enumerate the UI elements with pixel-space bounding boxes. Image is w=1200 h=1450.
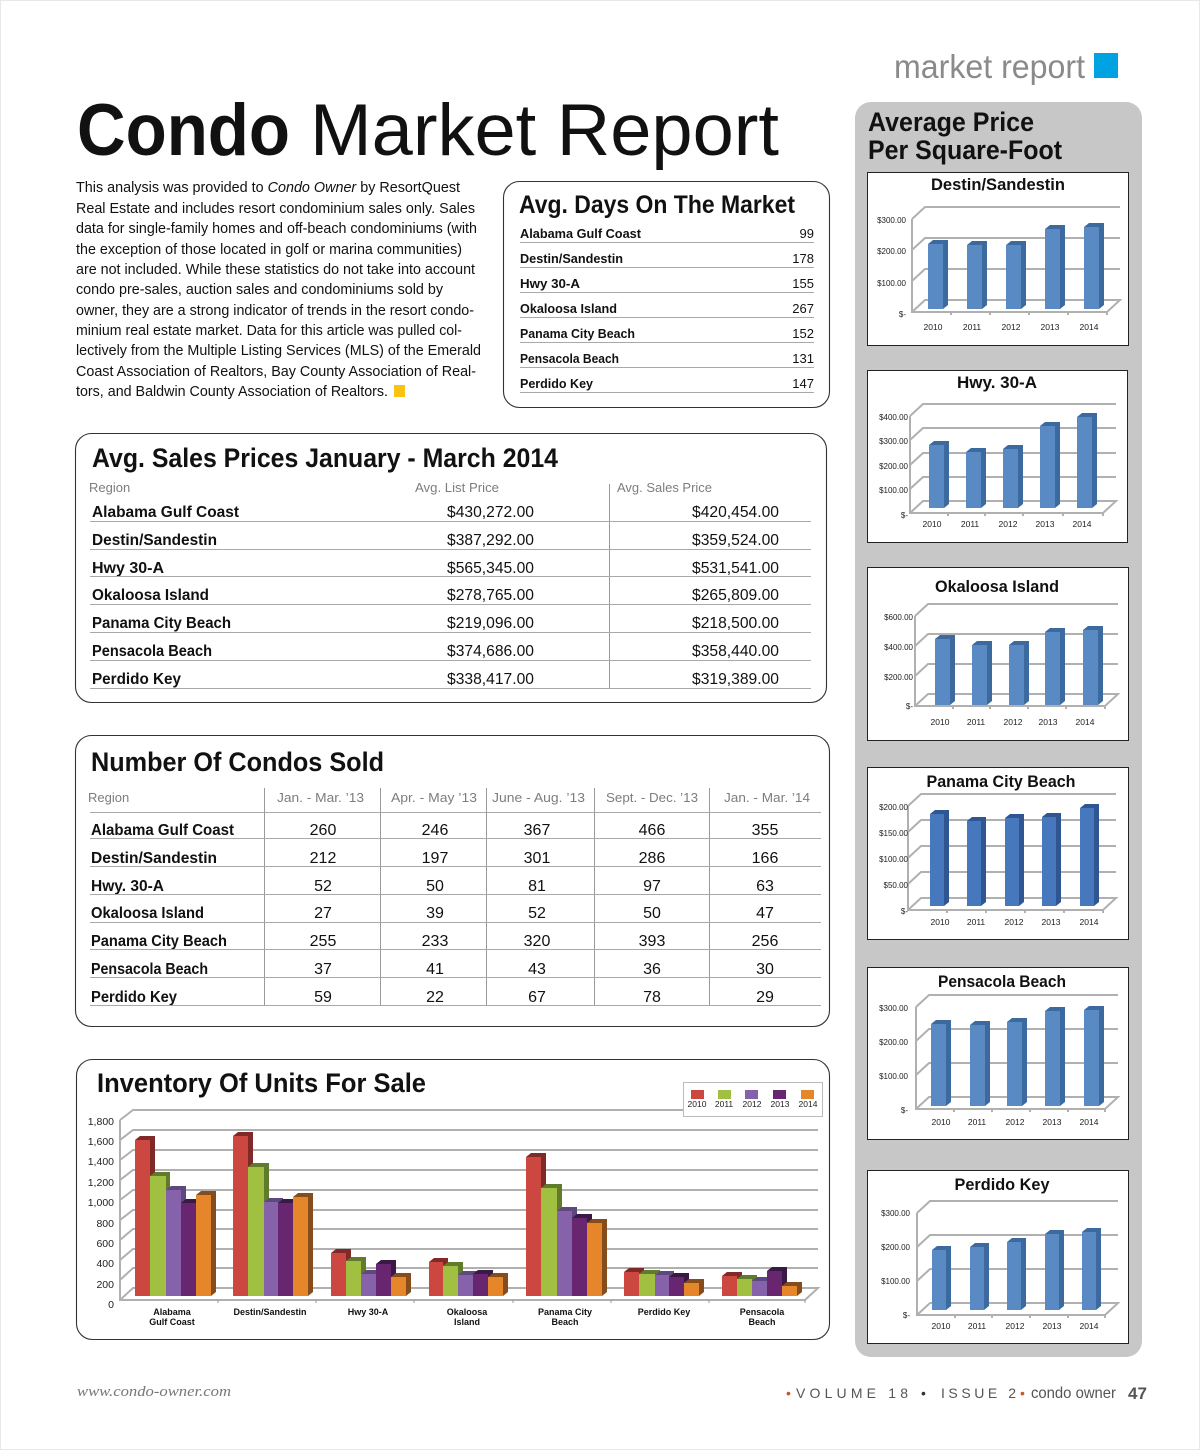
chart: Pensacola Beach: Pensacola Beach — [938, 973, 1066, 991]
chart: Okaloosa Island: 2014 — [1076, 717, 1095, 727]
chart: Pensacola Beach: 2013 — [1043, 1117, 1062, 1127]
bars: Okaloosa Island — [429, 1258, 508, 1296]
footer: volume, issue and page number: • — [786, 1385, 791, 1401]
row: Hwy. 30-A: 97 — [643, 878, 661, 895]
heading: average price per square-foot — [868, 107, 1062, 165]
chart grid and y axis — [88, 1110, 818, 1311]
row: Panama City Beach: 255 — [310, 933, 336, 950]
chart: Pensacola Beach: 2012 — [1006, 1117, 1025, 1127]
row: Pensacola Beach — [90, 643, 811, 660]
row: Hwy 30-A: $531,541.00 — [692, 560, 779, 577]
row: Perdido Key: Perdido Key — [92, 671, 181, 688]
row: Panama City Beach: $218,500.00 — [692, 615, 779, 632]
chart: Destin/Sandestin: 2013 — [1041, 322, 1060, 332]
row: Hwy. 30-A — [90, 878, 821, 895]
chart: Destin/Sandestin — [868, 172, 1128, 346]
chart: Panama City Beach: $200.00 — [879, 803, 909, 812]
chart: Destin/Sandestin: Destin/Sandestin — [931, 176, 1065, 194]
chart: Panama City Beach: 2014 — [1080, 917, 1099, 927]
chart: Panama City Beach: $- — [901, 907, 908, 916]
chart: Okaloosa Island: 2010 — [931, 717, 950, 727]
row: Panama City Beach: $219,096.00 — [447, 615, 534, 632]
row: Hwy 30-A: Hwy 30-A — [92, 560, 164, 577]
row: Destin/Sandestin: 212 — [310, 850, 336, 867]
row: Pensacola Beach: 41 — [426, 961, 444, 978]
row: Panama City Beach: Panama City Beach — [92, 615, 231, 632]
row: Destin/Sandestin: Destin/Sandestin — [520, 251, 623, 266]
category labels: Hwy 30-A — [348, 1307, 389, 1317]
row: Okaloosa Island: Okaloosa Island — [92, 587, 209, 604]
chart grid and y axis: 1,200 — [88, 1177, 114, 1189]
chart: Panama City Beach: $150.00 — [879, 829, 909, 838]
row: Perdido Key: Perdido Key — [520, 376, 594, 391]
row: Hwy 30-A: 155 — [792, 276, 814, 291]
category labels — [149, 1307, 785, 1327]
row: Hwy. 30-A: 50 — [426, 878, 444, 895]
row: Pensacola Beach: 131 — [792, 351, 814, 366]
category labels: Beach — [551, 1317, 579, 1327]
row: Perdido Key: 67 — [528, 989, 546, 1006]
row: Perdido Key: 78 — [643, 989, 661, 1006]
chart: Destin/Sandestin: 2010 — [924, 322, 943, 332]
bars: Alabama Gulf Coast — [135, 1136, 216, 1296]
chart: Destin/Sandestin: 2014 — [1080, 322, 1099, 332]
intro text block: condo pre-sales, auction sales and condominiums sold by — [76, 282, 444, 298]
chart: Okaloosa Island: $400.00 — [884, 643, 914, 652]
heading: avg days: Avg. Days On The Market — [519, 191, 796, 219]
row: Panama City Beach: 152 — [792, 326, 814, 341]
row: Perdido Key: $319,389.00 — [692, 671, 779, 688]
row: Destin/Sandestin — [90, 850, 821, 867]
table header: Jan. - Mar. ’14 — [724, 790, 810, 805]
row: Alabama Gulf Coast: Alabama Gulf Coast — [91, 822, 235, 839]
chart grid and y axis: 1,600 — [88, 1136, 114, 1148]
chart: Perdido Key: $- — [903, 1311, 910, 1320]
heading: average price per square-foot: Per Square-Foot — [868, 135, 1062, 165]
chart: Pensacola Beach: $100.00 — [879, 1072, 909, 1081]
row: Panama City Beach: 233 — [422, 933, 448, 950]
table header: June - Aug. ’13 — [492, 790, 585, 805]
chart: Pensacola Beach: $300.00 — [879, 1004, 909, 1013]
heading: condos sold: Number Of Condos Sold — [91, 747, 384, 777]
heading: inventory: Inventory Of Units For Sale — [97, 1068, 426, 1098]
section tag: market report: market report — [894, 48, 1085, 85]
chart: Destin/Sandestin: 2012 — [1002, 322, 1021, 332]
row: Okaloosa Island: 267 — [792, 301, 814, 316]
footer: volume, issue and page number: • — [921, 1385, 926, 1401]
chart: Destin/Sandestin: $300.00 — [877, 216, 907, 225]
category labels: Island — [454, 1317, 480, 1327]
row: Okaloosa Island: 39 — [426, 905, 444, 922]
chart: Pensacola Beach — [868, 968, 1128, 1140]
chart: Pensacola Beach: 2014 — [1080, 1117, 1099, 1127]
chart: Panama City Beach: Panama City Beach — [926, 773, 1076, 791]
table header: Avg. List Price — [415, 480, 499, 495]
chart: Panama City Beach: 2012 — [1005, 917, 1024, 927]
chart: Pensacola Beach: $- — [901, 1106, 908, 1115]
chart: Perdido Key: 2012 — [1006, 1321, 1025, 1331]
footer: volume, issue and page number — [786, 1384, 1147, 1403]
row: Alabama Gulf Coast: Alabama Gulf Coast — [520, 226, 642, 241]
chart: Panama City Beach: $100.00 — [879, 855, 909, 864]
heading: avg sales prices: Avg. Sales Prices January - March 2014 — [92, 443, 558, 473]
row: Destin/Sandestin: Destin/Sandestin — [92, 532, 217, 549]
chart: Hwy. 30-A: $100.00 — [879, 486, 909, 495]
intro text block: owner, they are a strong indicator of trends in the resort condo- — [76, 303, 474, 319]
row: Hwy. 30-A: Hwy. 30-A — [91, 878, 164, 895]
row: Hwy 30-A: $565,345.00 — [447, 560, 534, 577]
row: Okaloosa Island: Okaloosa Island — [91, 905, 204, 922]
row: Hwy. 30-A: 63 — [756, 878, 774, 895]
chart: Perdido Key: 2011 — [968, 1321, 986, 1331]
chart grid and y axis: 0 — [108, 1299, 114, 1311]
row: Okaloosa Island: $278,765.00 — [447, 587, 534, 604]
chart: Pensacola Beach: 2010 — [932, 1117, 951, 1127]
chart grid and y axis: 400 — [96, 1258, 114, 1270]
intro text block: Coast Association of Realtors, Bay County Association of Real- — [76, 364, 476, 380]
row: Panama City Beach — [520, 326, 814, 342]
chart: Panama City Beach — [868, 768, 1128, 940]
chart: Hwy. 30-A: $- — [901, 511, 908, 520]
chart: Pensacola Beach: $200.00 — [879, 1038, 909, 1047]
row: Alabama Gulf Coast — [520, 226, 814, 242]
intro text block — [76, 180, 481, 400]
row: Hwy. 30-A: 81 — [528, 878, 546, 895]
row: Alabama Gulf Coast: 260 — [310, 822, 336, 839]
row: Okaloosa Island — [90, 905, 821, 922]
chart: Okaloosa Island: $- — [906, 702, 913, 711]
row: Alabama Gulf Coast: 367 — [524, 822, 550, 839]
chart: Hwy. 30-A: 2012 — [999, 519, 1018, 529]
table header — [89, 480, 712, 495]
bars: Panama City Beach — [526, 1153, 607, 1296]
chart: Hwy. 30-A: 2013 — [1036, 519, 1055, 529]
panel: average price per square-foot — [855, 102, 1142, 1357]
chart: Perdido Key: $300.00 — [881, 1209, 911, 1218]
table header — [88, 790, 821, 812]
category labels: Okaloosa — [447, 1307, 488, 1317]
intro text block: minium real estate market. Data for this article was pulled col- — [76, 323, 462, 339]
row: Okaloosa Island: $265,809.00 — [692, 587, 779, 604]
legend: 2013 — [771, 1099, 790, 1109]
row: Okaloosa Island — [90, 587, 811, 604]
table header: Apr. - May ’13 — [391, 790, 477, 805]
bars: Perdido Key — [624, 1268, 704, 1296]
row: Destin/Sandestin — [520, 251, 814, 268]
chart: Hwy. 30-A: $200.00 — [879, 462, 909, 471]
row: Perdido Key: 147 — [792, 376, 814, 391]
chart: Perdido Key: 2013 — [1043, 1321, 1062, 1331]
chart: Destin/Sandestin: $200.00 — [877, 247, 907, 256]
chart: Perdido Key: 2014 — [1080, 1321, 1099, 1331]
intro text block: are not included. While these statistics do not take into account — [76, 262, 475, 278]
row: Okaloosa Island: 27 — [314, 905, 332, 922]
chart: Destin/Sandestin: $100.00 — [877, 279, 907, 288]
row: Alabama Gulf Coast — [90, 504, 811, 522]
panel: inventory of units for sale — [76, 1060, 830, 1340]
category labels: Beach — [748, 1317, 776, 1327]
table header: Region — [88, 790, 129, 805]
row: Destin/Sandestin: 286 — [639, 850, 665, 867]
row: Okaloosa Island — [520, 301, 814, 318]
chart: Hwy. 30-A: $300.00 — [879, 437, 909, 446]
row: Okaloosa Island: 52 — [528, 905, 546, 922]
category labels: Alabama — [153, 1307, 192, 1317]
footer: volume, issue and page number: ISSUE 2 — [941, 1385, 1016, 1401]
chart: Destin/Sandestin: $- — [899, 310, 906, 319]
row: Perdido Key — [520, 376, 814, 392]
row: Panama City Beach: 256 — [752, 933, 778, 950]
footer: website: www.condo-owner.com — [77, 1384, 231, 1400]
row: Destin/Sandestin: 301 — [524, 850, 550, 867]
chart: Hwy. 30-A: Hwy. 30-A — [957, 374, 1037, 392]
row: Pensacola Beach: $358,440.00 — [692, 643, 779, 660]
bars: Hwy 30-A — [331, 1249, 411, 1296]
chart grid and y axis: 800 — [96, 1218, 114, 1230]
row: Destin/Sandestin: 197 — [422, 850, 448, 867]
category labels: Panama City — [538, 1307, 592, 1317]
chart: Hwy. 30-A: 2011 — [961, 519, 979, 529]
bars: Destin/Sandestin — [233, 1132, 313, 1296]
row: Okaloosa Island: Okaloosa Island — [520, 301, 617, 316]
chart: Hwy. 30-A: 2014 — [1073, 519, 1092, 529]
chart: Hwy. 30-A: $400.00 — [879, 413, 909, 422]
table header: Avg. Sales Price — [617, 480, 712, 495]
chart: Okaloosa Island: 2013 — [1039, 717, 1058, 727]
chart grid and y axis: 1,800 — [88, 1116, 114, 1128]
row: Hwy 30-A — [90, 560, 811, 577]
chart: Perdido Key: Perdido Key — [954, 1176, 1050, 1194]
row: Destin/Sandestin: $359,524.00 — [692, 532, 779, 549]
row: Perdido Key — [90, 671, 811, 688]
row: Pensacola Beach: $374,686.00 — [447, 643, 534, 660]
row: Destin/Sandestin: 178 — [792, 251, 814, 266]
chart: Panama City Beach: $50.00 — [884, 881, 909, 890]
title — [77, 90, 779, 171]
row: Pensacola Beach: 37 — [314, 961, 332, 978]
row: Panama City Beach: Panama City Beach — [91, 933, 227, 950]
row: Perdido Key: 22 — [426, 989, 444, 1006]
chart: Perdido Key: 2010 — [932, 1321, 951, 1331]
row: Hwy 30-A: Hwy 30-A — [520, 276, 581, 291]
chart: Okaloosa Island: 2012 — [1004, 717, 1023, 727]
row: Pensacola Beach: 30 — [756, 961, 774, 978]
chart: Perdido Key: $200.00 — [881, 1243, 911, 1252]
legend: 2012 — [743, 1099, 762, 1109]
intro text block: tors, and Baldwin County Association of Realtors. — [76, 384, 388, 400]
chart: Okaloosa Island — [868, 568, 1128, 740]
row: Destin/Sandestin — [90, 532, 811, 550]
intro text block: lectively from the Multiple Listing Services (MLS) of the Emerald — [76, 343, 481, 359]
row: Okaloosa Island: 50 — [643, 905, 661, 922]
chart: Perdido Key: $100.00 — [881, 1277, 911, 1286]
row: Pensacola Beach — [90, 961, 821, 978]
intro text block: the exception of those located in golf or marina communities) — [76, 242, 462, 258]
chart: Perdido Key — [868, 1170, 1128, 1344]
row: Panama City Beach: 320 — [524, 933, 550, 950]
legend: 2011 — [715, 1099, 733, 1109]
chart: Okaloosa Island: $200.00 — [884, 673, 914, 682]
row: Alabama Gulf Coast: 466 — [639, 822, 665, 839]
category labels: Pensacola — [740, 1307, 785, 1317]
row: Alabama Gulf Coast: $420,454.00 — [692, 504, 779, 521]
title: Market Report — [310, 90, 779, 171]
row: Panama City Beach — [90, 615, 811, 632]
chart: Panama City Beach: 2013 — [1042, 917, 1061, 927]
chart: Hwy. 30-A: 2010 — [923, 519, 942, 529]
row: Perdido Key: 59 — [314, 989, 332, 1006]
row: Alabama Gulf Coast: Alabama Gulf Coast — [92, 504, 240, 521]
chart grid and y axis: 200 — [96, 1279, 114, 1291]
category labels: Destin/Sandestin — [233, 1307, 307, 1317]
row: Pensacola Beach: 43 — [528, 961, 546, 978]
chart: Okaloosa Island: Okaloosa Island — [935, 578, 1059, 596]
panel: avg sales prices — [76, 434, 826, 702]
row: Pensacola Beach: 36 — [643, 961, 661, 978]
bars: Pensacola Beach — [722, 1267, 802, 1296]
table header: Region — [89, 480, 130, 495]
row: Hwy. 30-A: 52 — [314, 878, 332, 895]
row: Panama City Beach — [90, 933, 821, 950]
footer: volume, issue and page number: condo owner — [1031, 1385, 1117, 1402]
row: Perdido Key: 29 — [756, 989, 774, 1006]
category labels: Perdido Key — [638, 1307, 690, 1317]
chart grid and y axis: 1,000 — [88, 1197, 114, 1209]
footer: volume, issue and page number: 47 — [1128, 1384, 1147, 1403]
footer: volume, issue and page number: • — [1020, 1385, 1025, 1401]
row: Destin/Sandestin: 166 — [752, 850, 778, 867]
table header: Jan. - Mar. ’13 — [277, 790, 364, 805]
chart: Panama City Beach: 2011 — [967, 917, 985, 927]
intro text block: This analysis was provided to Condo Owner by ResortQuest — [76, 180, 460, 196]
row: Alabama Gulf Coast — [90, 822, 821, 839]
intro text block: data for single-family homes and off-beach condominiums (with — [76, 221, 477, 237]
row: Alabama Gulf Coast: 99 — [800, 226, 814, 241]
row: Pensacola Beach: Pensacola Beach — [520, 351, 619, 366]
legend: 2010 — [688, 1099, 707, 1109]
row: Alabama Gulf Coast: 355 — [752, 822, 778, 839]
row: Panama City Beach: Panama City Beach — [520, 326, 635, 341]
row: Perdido Key: Perdido Key — [91, 989, 177, 1006]
row: Pensacola Beach — [520, 351, 814, 368]
chart: Panama City Beach: 2010 — [931, 917, 950, 927]
legend: 2014 — [799, 1099, 818, 1109]
row: Pensacola Beach: Pensacola Beach — [91, 961, 208, 978]
chart: Hwy. 30-A — [868, 370, 1128, 542]
row: Destin/Sandestin: Destin/Sandestin — [91, 850, 217, 867]
row: Panama City Beach: 393 — [639, 933, 665, 950]
chart grid and y axis: 600 — [96, 1238, 114, 1250]
chart grid and y axis: 1,400 — [88, 1156, 114, 1168]
panel: number of condos sold — [76, 736, 830, 1026]
intro text block: Real Estate and includes resort condominium sales only. Sales — [76, 201, 475, 217]
title: Condo — [77, 90, 290, 171]
footer: volume, issue and page number: VOLUME 18 — [796, 1385, 908, 1401]
chart: Okaloosa Island: 2011 — [967, 717, 985, 727]
chart: Destin/Sandestin: 2011 — [963, 322, 981, 332]
category labels: Gulf Coast — [149, 1317, 195, 1327]
legend — [684, 1082, 822, 1116]
row: Alabama Gulf Coast: 246 — [422, 822, 448, 839]
chart: Okaloosa Island: $600.00 — [884, 613, 914, 622]
row: Perdido Key — [90, 989, 821, 1006]
chart: Pensacola Beach: 2011 — [968, 1117, 986, 1127]
row: Okaloosa Island: 47 — [756, 905, 774, 922]
row: Destin/Sandestin: $387,292.00 — [447, 532, 534, 549]
row: Alabama Gulf Coast: $430,272.00 — [447, 504, 534, 521]
panel: avg days on the market — [504, 182, 830, 408]
row: Hwy 30-A — [520, 276, 814, 292]
row: Pensacola Beach: Pensacola Beach — [92, 643, 212, 660]
heading: average price per square-foot: Average Price — [868, 107, 1034, 137]
row: Perdido Key: $338,417.00 — [447, 671, 534, 688]
table header: Sept. - Dec. ’13 — [606, 790, 698, 805]
